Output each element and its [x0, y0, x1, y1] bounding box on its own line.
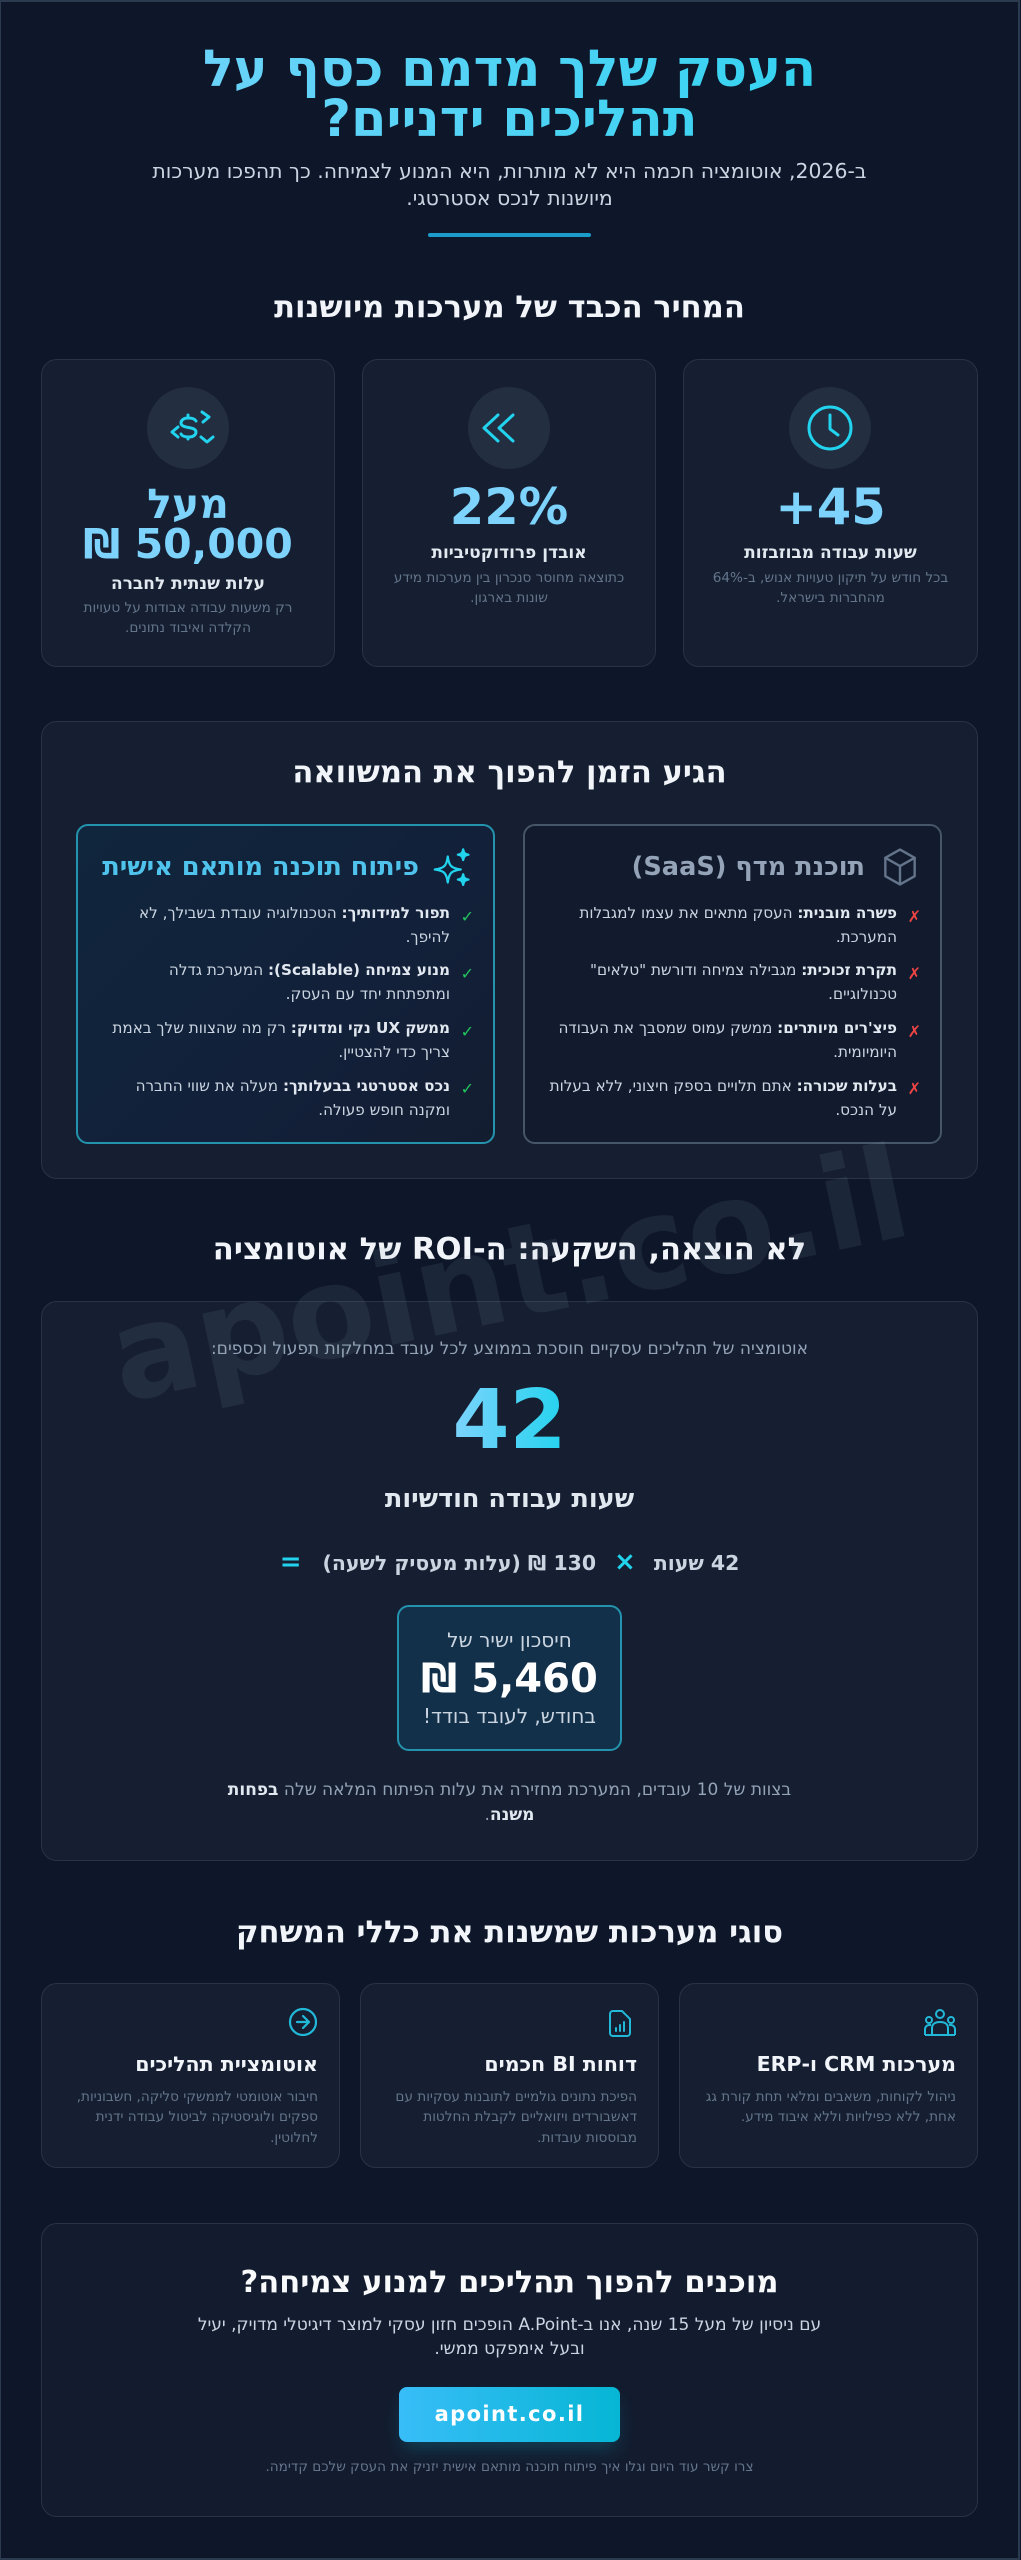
box: SaaS off the shelf: [524, 824, 943, 1144]
list item: ממשק UX נקי ומדויק: רק מה שהצוות שלך באמת: [113, 1019, 451, 1037]
card description: לחלוטין.: [271, 2130, 319, 2146]
panel: call to action: [42, 2223, 979, 2517]
header divider: [429, 233, 592, 237]
list item: [137, 1077, 451, 1119]
panel: stat 22 percent: [363, 359, 657, 667]
CTA text: עם ניסיון של מעל 15 שנה, אנו ב-A.Point הופכים חזון עסקי למוצר דיגיטלי מדויק, יעיל: [199, 2315, 822, 2335]
CTA heading: מוכנים להפוך תהליכים למנוע צמיחה?: [242, 2265, 779, 2300]
savings box: [398, 1605, 623, 1751]
title: [0, 45, 1021, 145]
panel: CRM and ERP: [680, 1983, 979, 2168]
subtitle: [152, 159, 868, 210]
CTA footnote: צרו קשר עוד היום וגלו איך פיתוח תוכנה מותאם אישית יזניק את העסק שלכם קדימה.: [266, 2459, 755, 2475]
icon: clock: [789, 387, 871, 469]
card title: אוטומציית תהליכים: [136, 2052, 319, 2076]
card description: ניהול לקוחות, משאבים ומלאי תחת קורת גג: [707, 2089, 957, 2105]
icon: users: [924, 2009, 956, 2036]
heading: ROI: לא הוצאה, השקעה: ה-ROI של אוטומציה: [214, 1232, 807, 1267]
icon: chevrons: [468, 387, 550, 469]
heading: cost of old systems: המחיר הכבד של מערכות מיושנות: [275, 290, 746, 325]
icon: cross: ✗: [909, 1022, 922, 1041]
icon: check: ✓: [462, 964, 475, 983]
stat label: עלות שנתית לחברה: [112, 574, 266, 594]
list item: בעלות שכורה: אתם תלויים בספק חיצוני, ללא בעלות: [551, 1077, 898, 1095]
box heading: תוכנת מדף (SaaS): [633, 852, 866, 882]
list item: [591, 961, 898, 1003]
CTA button: apoint.co.il: [436, 2402, 585, 2426]
list item: תקרת זכוכית: מגבילה צמיחה ודורשת "טלאים": [591, 961, 898, 979]
list item: ומתפתחת יחד עם העסק.: [287, 985, 451, 1003]
savings intro: חיסכון ישיר של: [448, 1628, 573, 1652]
title: תהליכים ידניים?: [322, 90, 699, 149]
card description: [396, 2089, 638, 2146]
card description: [78, 2089, 319, 2146]
CTA text: ובעל אימפקט ממשי.: [435, 2339, 586, 2359]
list item: להיפך.: [407, 928, 451, 946]
savings caption: בחודש, לעובד בודד!: [424, 1704, 597, 1728]
stat description: הקלדה ואיבוד נתונים.: [126, 620, 252, 636]
card title: מערכות CRM ו-ERP: [758, 2052, 957, 2076]
panel: process automation: [42, 1983, 341, 2168]
card description: ספקים ולוגיסטיקה לביטול עבודה ידנית: [97, 2109, 319, 2125]
stat description: מהחברות בישראל.: [777, 590, 886, 606]
stat description: בכל חודש על תיקון טעויות אנוש, ב-64%: [714, 570, 949, 586]
list item: פשרה מובנית: העסק מתאים את עצמו למגבלות: [580, 904, 898, 922]
card description: הפיכת נתונים גולמיים לתובנות עסקיות עם: [396, 2089, 638, 2105]
big number caption: שעות עבודה חודשיות: [386, 1484, 635, 1514]
icon: check: ✓: [462, 1079, 475, 1098]
list item: נכס אסטרטגי בבעלותך: מעלה את שווי החברה: [137, 1077, 451, 1095]
ROI conclusion: בצוות של 10 עובדים, המערכת מחזירה את עלות הפיתוח המלאה שלה בפחות: [229, 1780, 792, 1800]
card description: [706, 2089, 957, 2125]
list item: היומיומית.: [834, 1043, 898, 1061]
equation: 42 שעות×130 ₪ (עלות מעסיק לשעה)=: [281, 1547, 740, 1577]
icon: cross: ✗: [909, 907, 922, 926]
big number 42: 42: [453, 1373, 568, 1468]
list item: ומקנה חופש פעולה.: [319, 1101, 451, 1119]
icon: cross: ✗: [909, 964, 922, 983]
ROI intro text: אוטומציה של תהליכים עסקיים חוסכת בממוצע לכל עובד במחלקות תפעול וכספים:: [212, 1339, 809, 1359]
stat description: [394, 570, 625, 606]
card description: דאשבורדים ויזואליים לקבלת החלטות: [424, 2109, 638, 2125]
subtitle: ב-2026, אוטומציה חכמה היא לא מותרות, היא המנוע לצמיחה. כך תהפכו מערכות: [153, 159, 868, 183]
icon: check: ✓: [462, 907, 475, 926]
list item: תפור למידותיך: הטכנולוגיה עובדת בשבילך, לא: [140, 904, 451, 922]
icon: cross: ✗: [909, 1079, 922, 1098]
list item: [140, 904, 451, 946]
list item: [580, 904, 898, 946]
panel: stat 45 hours: [684, 359, 979, 667]
list item: [559, 1019, 898, 1061]
list item: טכנולוגיים.: [829, 985, 898, 1003]
stat description: [714, 570, 949, 606]
comparison heading: הגיע הזמן להפוך את המשוואה: [293, 755, 728, 790]
card description: מבוססות עובדות.: [538, 2130, 638, 2146]
icon: check: ✓: [462, 1022, 475, 1041]
list item: [170, 961, 451, 1003]
stat description: שונות בארגון.: [471, 590, 549, 606]
icon: cube: [884, 848, 916, 886]
stat label: שעות עבודה מבוזבזות: [745, 543, 918, 563]
title: העסק שלך מדמם כסף על: [204, 40, 817, 99]
stat description: רק משעות עבודה אבודות על טעויות: [85, 600, 293, 616]
card title: דוחות BI חכמים: [485, 2052, 638, 2076]
panel: BI reports: [361, 1983, 660, 2168]
list item: [112, 1019, 451, 1061]
box heading: פיתוח תוכנה מותאם אישית: [103, 852, 420, 882]
panel: comparison: [42, 721, 979, 1179]
watermark: apoint.co.il: [98, 1118, 922, 1433]
stat value: 50,000 ₪: [84, 520, 294, 568]
ROI conclusion: משנה.: [486, 1805, 535, 1825]
heading: system types: סוגי מערכות שמשנות את כללי המשחק: [237, 1915, 784, 1950]
icon: broken dollar: [147, 387, 229, 469]
stat value: +45: [776, 478, 887, 536]
panel: stat 50000: [42, 359, 336, 667]
list item: צריך כדי להצטיין.: [339, 1043, 451, 1061]
list item: פיצ'רים מיותרים: ממשק עמוס שמסבך את העבודה: [559, 1019, 898, 1037]
list item: המערכת.: [837, 928, 898, 946]
stat label: אובדן פרודוקטיביות: [432, 543, 588, 563]
panel: ROI: [42, 1301, 979, 1861]
box: custom software: [77, 824, 496, 1144]
subtitle: מיושנות לנכס אסטרטגי.: [407, 186, 614, 210]
list item: מנוע צמיחה (Scalable): המערכת גדלה: [170, 961, 451, 979]
stat description: [84, 600, 293, 636]
ROI conclusion: [228, 1780, 792, 1825]
icon: report file: [609, 2010, 631, 2037]
stat value: מעל: [148, 480, 230, 528]
list item: על הנכס.: [836, 1101, 898, 1119]
CTA button: [400, 2387, 621, 2442]
savings value: 5,460 ₪: [422, 1656, 599, 1702]
stat value: [84, 480, 294, 568]
card description: אחת, ללא כפילויות וללא איבוד מידע.: [742, 2109, 957, 2125]
stat value: 22%: [451, 478, 569, 536]
icon: arrow circle: [288, 2008, 318, 2036]
icon: sparkles: [434, 848, 470, 886]
card description: חיבור אוטומטי לממשקי סליקה, חשבוניות,: [78, 2089, 319, 2105]
CTA text: [198, 2315, 822, 2359]
stat description: כתוצאה מחוסר סנכרון בין מערכות מידע: [395, 570, 625, 586]
list item: [550, 1077, 898, 1119]
